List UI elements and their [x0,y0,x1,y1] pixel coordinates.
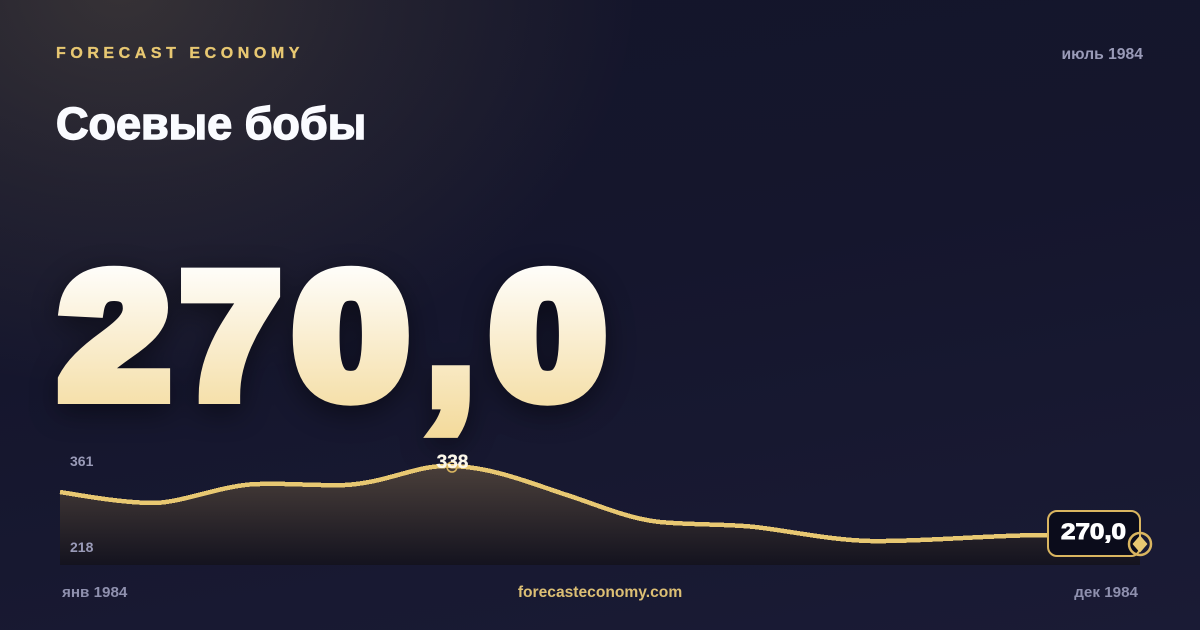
brand label: FORECAST ECONOMY [56,45,304,62]
peak value: 338 [437,452,468,473]
current value badge: 270,0 [1061,519,1126,544]
peak marker [447,462,457,472]
big value: , [428,235,473,440]
big value: 0 [294,239,408,434]
min label: 218 [70,539,94,555]
date top right: июль 1984 [1061,46,1143,63]
current value badge [1048,511,1140,556]
chart line [60,466,1047,541]
big value [56,235,610,446]
website: forecasteconomy.com [518,584,682,601]
end date: дек 1984 [1074,584,1138,601]
start date: янв 1984 [62,584,127,601]
chart area fill [60,466,1140,565]
end marker [1129,533,1151,555]
big value: 0 [491,239,605,434]
big value: 7 [182,239,280,434]
big value: 2 [60,239,169,434]
title: Соевые бобы [56,98,366,149]
max label: 361 [70,453,94,469]
